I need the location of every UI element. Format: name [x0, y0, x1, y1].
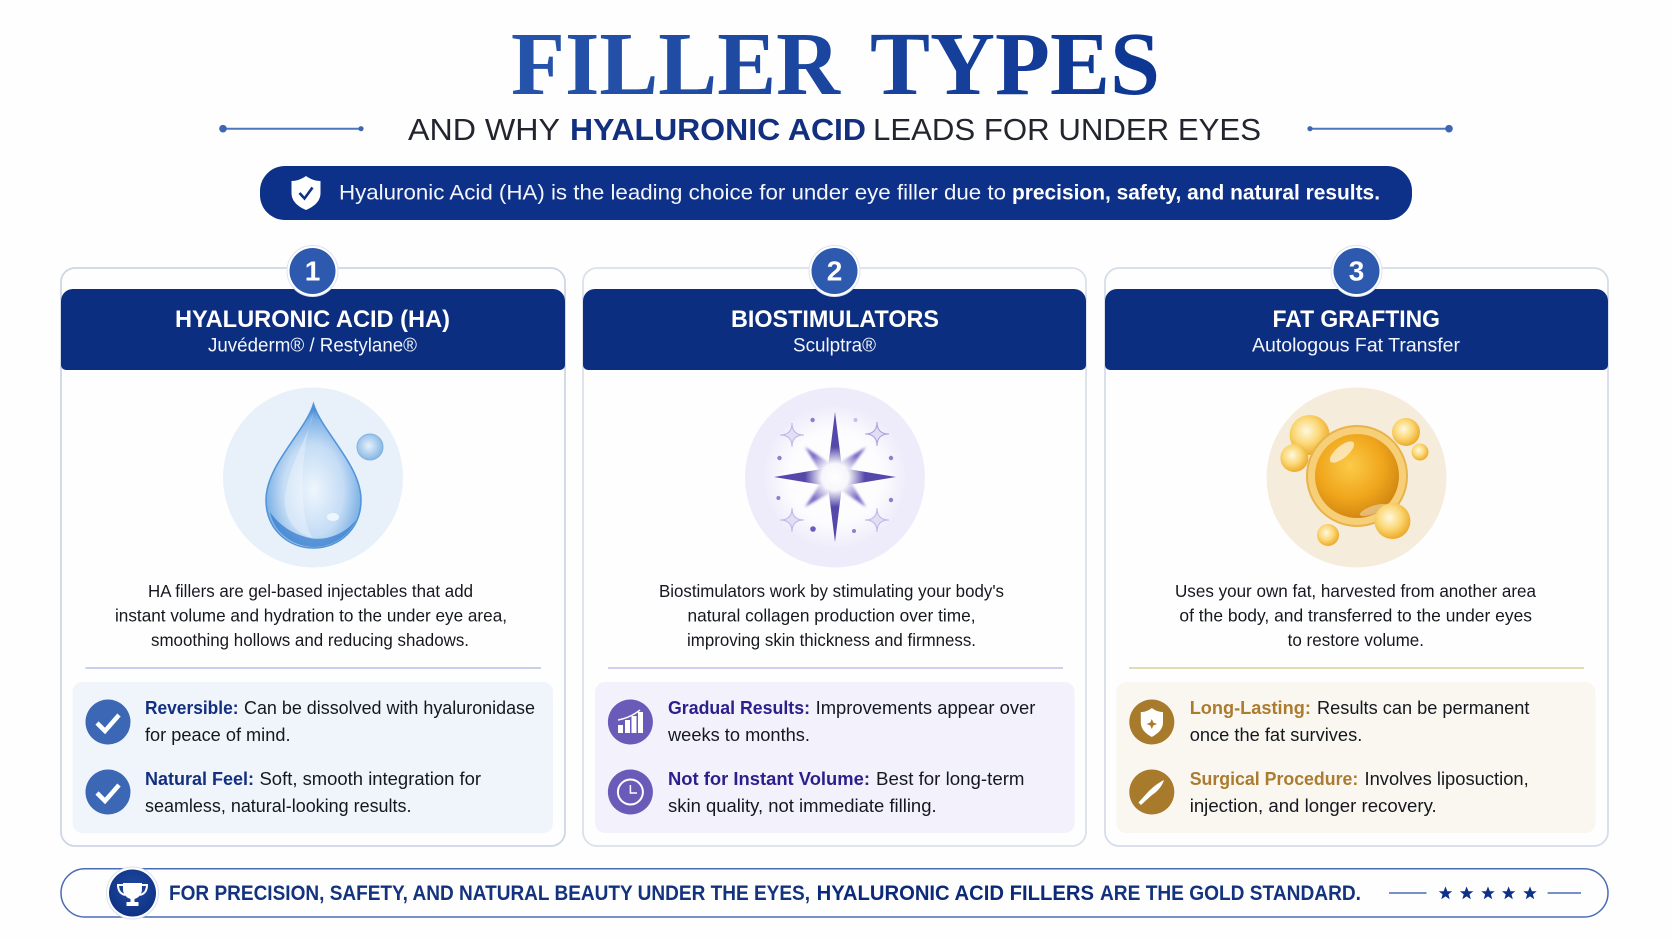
icon: sparkle star	[745, 388, 925, 568]
number badge 2: 2	[827, 256, 842, 286]
benefit: surgical procedure: Involves liposuction,	[1364, 768, 1529, 789]
description: Biostimulators work by stimulating your body's	[659, 581, 1004, 601]
benefit: reversible: for peace of mind.	[145, 724, 290, 745]
five star rating	[1389, 886, 1581, 899]
number badge 3	[1331, 246, 1382, 296]
benefit: natural feel: Soft, smooth integration for	[260, 768, 481, 789]
benefits panel	[1116, 682, 1595, 833]
title	[511, 15, 1160, 114]
title: TYPES	[870, 15, 1160, 114]
description: instant volume and hydration to the under eye area,	[115, 606, 507, 626]
number badge 2	[809, 246, 860, 296]
description: Uses your own fat, harvested from another area	[1175, 581, 1536, 601]
panel header: Juvéderm® / Restylane®	[208, 336, 417, 356]
icon: scalpel	[1129, 770, 1174, 814]
description: HA fillers are gel-based injectables that add	[148, 581, 473, 601]
number badge 1: 1	[305, 256, 320, 286]
benefit: reversible	[145, 697, 535, 745]
icon: trophy	[106, 867, 158, 919]
panel: fat grafting	[1105, 246, 1608, 846]
panel header	[61, 289, 565, 370]
banner text: precision, safety, and natural results.	[1012, 182, 1380, 204]
subtitle: LEADS FOR UNDER EYES	[873, 112, 1261, 147]
description	[659, 581, 1004, 650]
panel header: Sculptra®	[793, 336, 876, 356]
icon: shield check	[292, 176, 320, 210]
subtitle: HYALURONIC ACID	[570, 112, 866, 147]
panel header	[1105, 289, 1608, 370]
panel header: FAT GRAFTING	[1272, 306, 1440, 333]
description	[115, 581, 507, 650]
footer banner	[61, 867, 1608, 919]
benefit: gradual results: Gradual Results:	[668, 697, 810, 718]
benefit: not for instant volume	[668, 768, 1024, 816]
description	[1175, 581, 1536, 650]
benefit: gradual results	[667, 697, 1035, 745]
benefit: not for instant volume: Not for Instant Volume:	[668, 768, 870, 789]
footer text: FOR PRECISION, SAFETY, AND NATURAL BEAUTY UNDER THE EYES,	[169, 882, 810, 905]
key message banner	[260, 166, 1412, 220]
benefit: long-lasting: Long-Lasting:	[1190, 697, 1311, 718]
footer text	[169, 882, 1361, 905]
footer text: HYALURONIC ACID FILLERS	[817, 882, 1094, 905]
benefit: natural feel: seamless, natural-looking results.	[145, 795, 412, 816]
icon: fat cell	[1266, 388, 1446, 568]
benefit: reversible: Can be dissolved with hyaluronidase	[244, 697, 535, 718]
benefit: not for instant volume: Best for long-term	[876, 768, 1024, 789]
number badge 3: 3	[1349, 256, 1364, 286]
left subtitle ornament	[219, 125, 364, 132]
number badge 1	[287, 246, 338, 296]
subtitle: AND WHY	[408, 112, 560, 147]
footer text: ARE THE GOLD STANDARD.	[1100, 882, 1361, 905]
description: to restore volume.	[1288, 630, 1424, 650]
description: smoothing hollows and reducing shadows.	[151, 630, 469, 650]
banner text: Hyaluronic Acid (HA) is the leading choice for under eye filler due to	[339, 182, 1006, 204]
title: FILLER	[511, 15, 841, 114]
panel header	[583, 289, 1086, 370]
benefit: surgical procedure: Surgical Procedure:	[1190, 768, 1358, 789]
benefit: surgical procedure	[1190, 768, 1529, 816]
panel header: BIOSTIMULATORS	[731, 306, 939, 333]
panel header: HYALURONIC ACID (HA)	[175, 306, 450, 333]
subtitle	[408, 112, 1261, 147]
description: improving skin thickness and firmness.	[687, 630, 976, 650]
icon: check	[86, 770, 130, 814]
benefit: long-lasting: once the fat survives.	[1190, 724, 1362, 745]
icon: check	[86, 700, 130, 744]
icon: clock	[608, 770, 653, 814]
icon: shield	[1129, 700, 1174, 744]
panel: hyaluronic acid	[61, 246, 565, 846]
panel: biostimulators	[583, 246, 1086, 846]
benefit: not for instant volume: skin quality, not immediate filling.	[668, 795, 937, 816]
benefit: natural feel	[145, 768, 481, 816]
icon: growth chart	[608, 700, 653, 744]
panel header: Autologous Fat Transfer	[1252, 336, 1461, 356]
benefit: gradual results: weeks to months.	[667, 724, 810, 745]
benefit: long-lasting: Results can be permanent	[1317, 697, 1529, 718]
benefit: gradual results: Improvements appear over	[816, 697, 1035, 718]
benefits panel	[72, 682, 553, 833]
benefit: natural feel: Natural Feel:	[145, 768, 254, 789]
icon: water drop	[223, 388, 403, 568]
benefit: long-lasting	[1190, 697, 1529, 745]
benefit: surgical procedure: injection, and longer recovery.	[1190, 795, 1437, 816]
description: of the body, and transferred to the under eyes	[1179, 606, 1532, 626]
right subtitle ornament	[1307, 125, 1453, 132]
banner text	[339, 182, 1380, 204]
benefit: reversible: Reversible:	[145, 697, 238, 718]
description: natural collagen production over time,	[688, 606, 976, 626]
benefits panel	[595, 682, 1075, 833]
